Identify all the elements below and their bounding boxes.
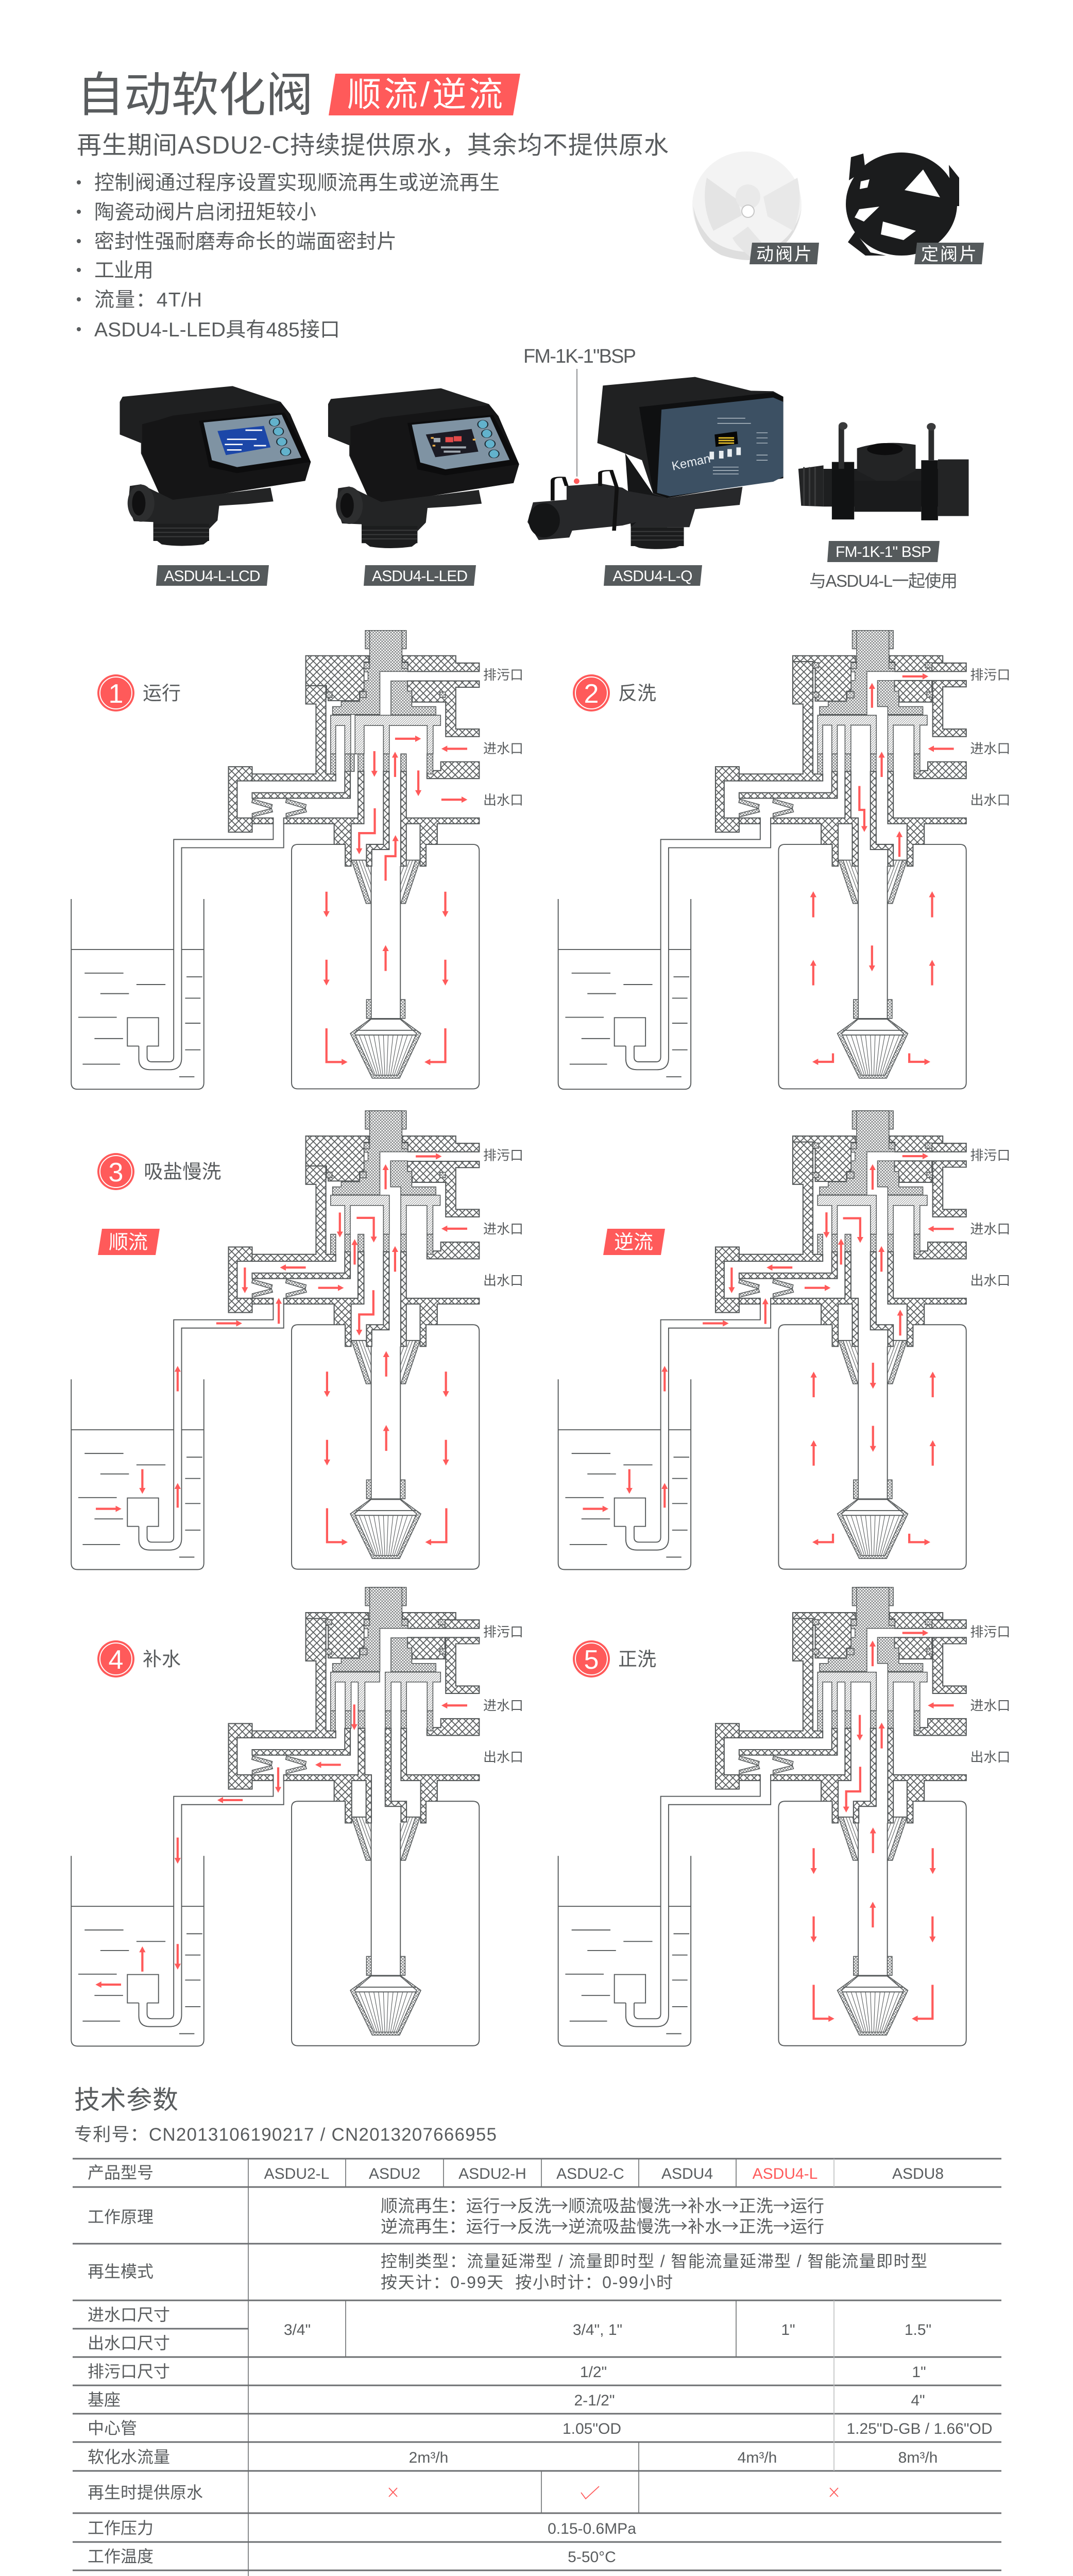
badge 4: 4: [109, 1645, 123, 1675]
valve diagram 5: [558, 1587, 1010, 2046]
valve diagram 3 downflow: [71, 1111, 523, 1569]
model names: ASDU2-H: [458, 2165, 526, 2182]
tag: ASDU4-L-Q: ASDU4-L-Q: [613, 568, 692, 585]
feature list: 密封性强耐磨寿命长的端面密封片: [94, 231, 397, 253]
feature list: ASDU4-L-LED具有485接口: [94, 319, 340, 341]
tag: ASDU4-L-LCD: ASDU4-L-LCD: [164, 568, 261, 585]
tag: 动阀片: 动阀片: [756, 245, 812, 264]
product: FM-1K-1" BSP flow meter: [798, 422, 969, 520]
valve diagram 5: 进水口: [970, 1698, 1010, 1713]
valve diagram 2: 排污口: [970, 667, 1010, 683]
model names: [264, 2165, 944, 2182]
valve diagram 3 upflow: 排污口: [970, 1147, 1010, 1163]
tag: 顺流: [98, 1229, 160, 1255]
label: FM-1K-1"BSP: FM-1K-1"BSP: [523, 346, 636, 367]
tag: FM-1K-1" BSP: [827, 541, 940, 562]
valve diagram 4: 出水口: [483, 1749, 523, 1765]
valve diagram 4: [71, 1587, 523, 2046]
valve diagram 4: 进水口: [483, 1698, 523, 1713]
model names: ASDU4-L: [753, 2165, 817, 2182]
step label: 运行: [143, 683, 181, 704]
badge 3: 3: [109, 1158, 123, 1188]
size values: 1.05"OD: [563, 2420, 621, 2437]
badge 2: [573, 674, 610, 711]
general values: 5-50°C: [568, 2549, 616, 2566]
model names: ASDU4: [661, 2165, 713, 2182]
panel: step 5 正洗: [558, 1587, 1010, 2046]
badge 5: 5: [584, 1645, 599, 1675]
size values: 2-1/2": [574, 2392, 615, 2409]
general values: 0.15-0.6MPa: [548, 2520, 636, 2537]
patent numbers: 专利号：CN2013106190217 / CN2013207666955: [74, 2125, 497, 2145]
specification table: [73, 2159, 1001, 2576]
general values: [473, 2520, 731, 2576]
row labels: 出水口尺寸: [88, 2334, 170, 2352]
title tag: 顺流/逆流: 顺流/逆流: [347, 75, 503, 113]
working principle: [381, 2192, 824, 2238]
photo: fixed disc 定阀片: [846, 152, 959, 256]
row labels: 基座: [88, 2391, 121, 2409]
badge 1: [97, 674, 134, 711]
regeneration mode: 按天计：0-99天 按小时计：0-99小时: [381, 2273, 673, 2292]
size values: [284, 2321, 993, 2466]
feature list: 陶瓷动阀片启闭扭矩较小: [94, 201, 316, 224]
panel: step 1 运行: [71, 631, 523, 1089]
step label: 补水: [143, 1649, 181, 1670]
feature list: [77, 172, 500, 341]
row labels: 排污口尺寸: [88, 2362, 170, 2381]
row labels: [88, 2163, 203, 2576]
tag: 逆流: [603, 1229, 665, 1255]
working principle: 逆流再生：运行→反洗→逆流吸盐慢洗→补水→正洗→运行: [381, 2213, 824, 2238]
size values: 1.25"D-GB / 1.66"OD: [846, 2420, 993, 2437]
leader line to flow meter: [576, 369, 577, 477]
row labels: 软化水流量: [88, 2448, 170, 2466]
badge 2: 2: [584, 679, 599, 709]
feature list: 控制阀通过程序设置实现顺流再生或逆流再生: [94, 172, 500, 194]
panel: step 3 吸盐慢洗 逆流: [558, 1111, 1010, 1569]
tag: ASDU4-L-LED: ASDU4-L-LED: [372, 568, 468, 585]
row labels: 工作原理: [88, 2208, 154, 2226]
panel: step 4 补水: [71, 1587, 523, 2046]
valve diagram 2: 进水口: [970, 741, 1010, 756]
tag: 定阀片: 定阀片: [921, 245, 977, 264]
title: 自动软化阀: [77, 69, 313, 122]
valve diagram 2: [558, 631, 1010, 1089]
valve diagram 5: 出水口: [970, 1749, 1010, 1765]
valve diagram 1: 出水口: [483, 792, 523, 808]
row labels: 再生模式: [88, 2262, 154, 2281]
step label: 吸盐慢洗: [144, 1161, 221, 1182]
valve diagram 4: 排污口: [483, 1624, 523, 1639]
row labels: 产品型号: [88, 2163, 154, 2182]
valve diagram 1: 排污口: [483, 667, 523, 683]
valve diagram 3 upflow: 进水口: [970, 1221, 1010, 1236]
valve diagram 3 upflow: [558, 1111, 1010, 1569]
tag: 顺流: 顺流: [109, 1232, 148, 1253]
heading: 技术参数: 技术参数: [74, 2086, 178, 2114]
valve diagram 1: 进水口: [483, 741, 523, 756]
feature list: 流量：4T/H: [94, 289, 202, 311]
row labels: 进水口尺寸: [88, 2306, 170, 2324]
valve diagram 1: [71, 631, 523, 1089]
model names: ASDU2-L: [264, 2165, 329, 2182]
photo: moving disc 动阀片: [692, 151, 802, 260]
size values: 1": [781, 2321, 795, 2338]
valve diagram 3 downflow: 排污口: [483, 1147, 523, 1163]
panel: step 3 吸盐慢洗 顺流: [71, 1111, 523, 1569]
row labels: 工作温度: [88, 2547, 154, 2566]
row labels: 再生时提供原水: [88, 2483, 203, 2502]
valve diagram 5: 排污口: [970, 1624, 1010, 1639]
regeneration mode: [381, 2252, 927, 2292]
panel: step 2 反洗: [558, 631, 1010, 1089]
size values: 3/4": [284, 2321, 311, 2338]
tag: FM-1K-1" BSP: FM-1K-1" BSP: [836, 544, 931, 561]
badge 1: 1: [109, 679, 123, 709]
size values: 2m³/h: [409, 2449, 448, 2466]
size values: 3/4", 1": [573, 2321, 622, 2338]
feature list: 工业用: [94, 260, 154, 282]
step label: 反洗: [618, 683, 656, 704]
subtitle: 再生期间ASDU2-C持续提供原水，其余均不提供原水: [77, 132, 669, 159]
size values: 8m³/h: [898, 2449, 938, 2466]
raw water marks: [389, 2486, 838, 2499]
size values: 4m³/h: [738, 2449, 777, 2466]
model names: ASDU2-C: [556, 2165, 624, 2182]
product: ASDU4-L-LED: [328, 388, 519, 548]
step label: 正洗: [618, 1649, 656, 1670]
tag: ASDU4-L-Q: [604, 565, 702, 586]
size values: 4": [911, 2392, 925, 2409]
product: ASDU4-L-Q with flow meter: [527, 377, 784, 549]
badge 4: [97, 1640, 134, 1677]
note: 与ASDU4-L一起使用: 与ASDU4-L一起使用: [809, 571, 958, 590]
size values: 1/2": [580, 2364, 607, 2381]
size values: 1.5": [905, 2321, 931, 2338]
valve diagram 3 downflow: 进水口: [483, 1221, 523, 1236]
working principle: 顺流再生：运行→反洗→顺流吸盐慢洗→补水→正洗→运行: [381, 2192, 824, 2217]
valve diagram 2: 出水口: [970, 792, 1010, 808]
badge 5: [573, 1640, 610, 1677]
size values: 1": [912, 2364, 926, 2381]
brand on panel: Keman: [671, 452, 712, 473]
model names: ASDU2: [369, 2165, 420, 2182]
badge 3: [97, 1153, 134, 1190]
tag: 逆流: 逆流: [614, 1232, 653, 1253]
row labels: 中心管: [88, 2419, 137, 2437]
product: ASDU4-L-LCD: [120, 386, 311, 546]
row labels: 工作压力: [88, 2519, 154, 2537]
valve diagram 3 downflow: 出水口: [483, 1273, 523, 1288]
model names: ASDU8: [892, 2165, 944, 2182]
regeneration mode: 控制类型：流量延滞型 / 流量即时型 / 智能流量延滞型 / 智能流量即时型: [381, 2252, 927, 2270]
valve diagram 3 upflow: 出水口: [970, 1273, 1010, 1288]
